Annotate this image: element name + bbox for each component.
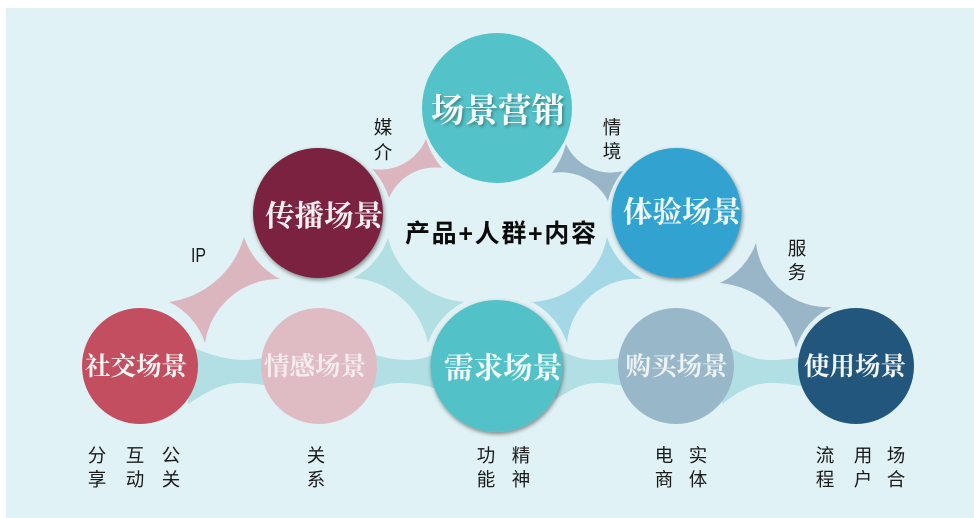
center heading: 产品+人群+内容 xyxy=(405,219,596,248)
label: 媒介: 媒 xyxy=(374,117,392,138)
circle: 需求场景: 需求场景 xyxy=(444,352,562,385)
circle: 体验场景 xyxy=(612,148,742,278)
circle: 购买场景: 购买场景 xyxy=(625,352,728,381)
list: 功能 精神: 能 xyxy=(477,469,495,490)
circle: 体验场景: 体验场景 xyxy=(623,196,741,229)
list: 关系: 系 xyxy=(307,469,325,490)
list: 分享 互动 公关: 互 xyxy=(126,445,144,466)
list: 分享 互动 公关: 关 xyxy=(162,469,180,490)
list: 流程 用户 场合: 合 xyxy=(887,469,905,490)
connector: 传播 to 需求 xyxy=(353,238,464,343)
list: 功能 精神: 功 xyxy=(477,445,495,466)
band: 购买 to 使用 xyxy=(722,347,805,404)
band: 社交 to 情感 xyxy=(188,346,270,404)
label: 服务 xyxy=(788,238,806,283)
label: 情境 xyxy=(603,117,621,162)
list: 流程 用户 场合: 用 xyxy=(854,445,872,466)
list: 电商 实体: 体 xyxy=(689,469,707,490)
connector: 体验 to 需求 xyxy=(532,237,643,343)
list: 关系: 关 xyxy=(307,445,325,466)
list: 流程 用户 场合: 程 xyxy=(816,469,834,490)
list: 流程 用户 场合: 户 xyxy=(854,469,872,490)
circle: 场景营销: 场景营销 xyxy=(431,93,565,130)
circle: 社交场景 xyxy=(82,308,198,424)
label: 服务: 务 xyxy=(788,262,806,283)
label: 媒介 xyxy=(374,117,393,163)
circle: 情感场景 xyxy=(261,308,377,424)
list: 电商 实体: 电 xyxy=(655,445,673,466)
circle: 社交场景: 社交场景 xyxy=(85,352,187,381)
list: 电商 实体 xyxy=(655,445,707,490)
band: 需求 to 购买 xyxy=(555,349,625,400)
list: 流程 用户 场合: 流 xyxy=(816,445,834,466)
list: 分享 互动 公关: 分 xyxy=(88,445,106,466)
list: 电商 实体: 实 xyxy=(689,445,707,466)
list: 流程 用户 场合 xyxy=(816,445,905,490)
connector: 社交 to 传播 xyxy=(169,237,280,343)
list: 分享 互动 公关: 动 xyxy=(126,469,144,490)
connector: 传播 to 场景营销 xyxy=(372,139,442,198)
circle: 使用场景: 使用场景 xyxy=(804,352,906,381)
list: 功能 精神 xyxy=(477,445,530,490)
label: 媒介: 介 xyxy=(374,142,393,163)
band: 情感 to 需求 xyxy=(366,351,440,392)
list: 电商 实体: 商 xyxy=(655,469,673,490)
circle: 购买场景 xyxy=(618,308,734,424)
label: 服务: 服 xyxy=(788,238,806,259)
label: IP: IP xyxy=(191,245,206,267)
list: 分享 互动 公关 xyxy=(88,445,180,490)
connector network xyxy=(169,139,832,404)
list: 功能 精神: 神 xyxy=(512,469,530,490)
circle: 场景营销 xyxy=(422,33,572,183)
circle: 使用场景 xyxy=(798,308,914,424)
circle: 情感场景: 情感场景 xyxy=(264,352,366,381)
list: 流程 用户 场合: 场 xyxy=(887,445,905,466)
circle: 需求场景 xyxy=(430,300,562,432)
circle: 传播场景: 传播场景 xyxy=(265,200,383,233)
connector: 体验 to 使用 xyxy=(720,243,832,348)
label: 情境: 境 xyxy=(603,141,621,162)
list: 分享 互动 公关: 享 xyxy=(88,469,106,490)
list: 功能 精神: 精 xyxy=(512,445,530,466)
circle: 传播场景 xyxy=(253,148,383,278)
list: 关系 xyxy=(307,445,325,490)
list: 分享 互动 公关: 公 xyxy=(162,445,180,466)
label: 情境: 情 xyxy=(603,117,621,138)
connector: 场景营销 to 体验 xyxy=(552,144,623,201)
